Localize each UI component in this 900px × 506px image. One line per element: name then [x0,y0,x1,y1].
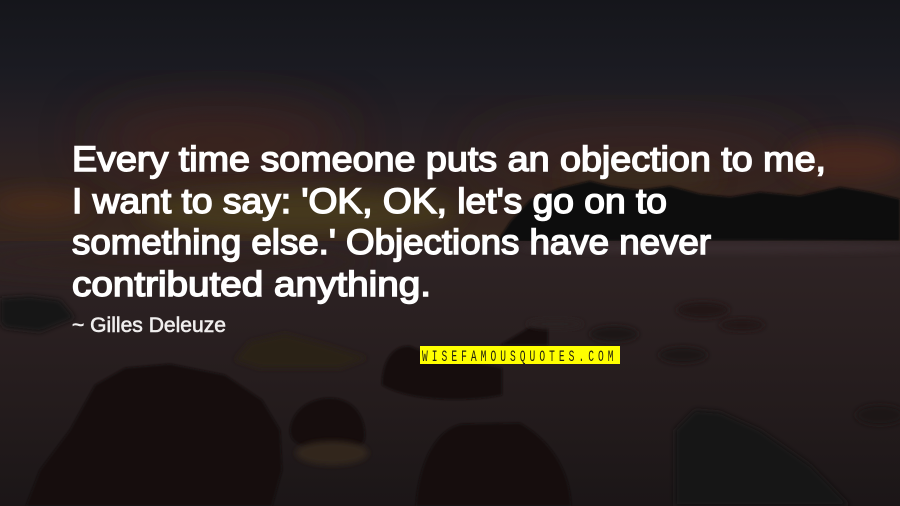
background: misty water [0,241,900,506]
background: dusk sky [0,0,900,244]
quote text: Every time someone puts an objection to me, [72,140,826,179]
quote text: I want to say: 'OK, OK, let's go on to [72,182,667,221]
quote text: contributed anything. [72,265,431,304]
background: wooded headland [497,181,900,242]
background: rocks [0,296,900,506]
quote text: something else.' Objections have never [72,223,711,262]
author attribution: ~ Gilles Deleuze [72,314,226,337]
quote text [72,140,826,304]
watermark badge: WISEFAMOUSQUOTES.COM [422,348,618,366]
